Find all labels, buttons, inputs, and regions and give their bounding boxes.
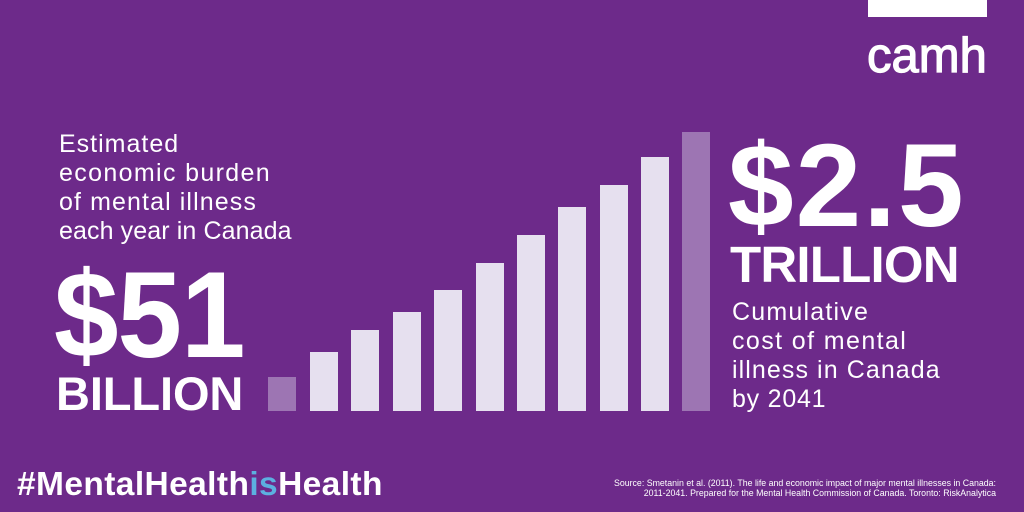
- right description text: by 2041: [732, 385, 826, 413]
- right description text: illness in Canada: [732, 356, 941, 384]
- stat: $2.5: $2.5: [728, 120, 966, 252]
- stat label: BILLION: BILLION: [56, 367, 243, 420]
- left description text: of mental illness: [59, 188, 257, 216]
- stat label: TRILLION: TRILLION: [730, 236, 959, 293]
- left description text: economic burden: [59, 159, 271, 187]
- left description text: [59, 130, 292, 245]
- stat: $51: $51: [54, 245, 245, 383]
- logo block: [868, 0, 987, 17]
- left description text: each year in Canada: [59, 217, 292, 245]
- source note: 2011-2041. Prepared for the Mental Health Commission of Canada. Toronto: RiskAnalytica: [644, 488, 996, 498]
- source note: Source: Smetanin et al. (2011). The life and economic impact of major mental illnesses in Canada:: [614, 478, 996, 488]
- logo wordmark: camh: camh: [867, 29, 987, 83]
- right description text: cost of mental: [732, 327, 907, 355]
- source note: [614, 478, 996, 498]
- right description text: [732, 298, 941, 413]
- bar chart: [268, 132, 710, 411]
- left description text: Estimated: [59, 130, 179, 158]
- hashtag: #MentalHealthisHealth: [17, 466, 383, 502]
- right description text: Cumulative: [732, 298, 869, 326]
